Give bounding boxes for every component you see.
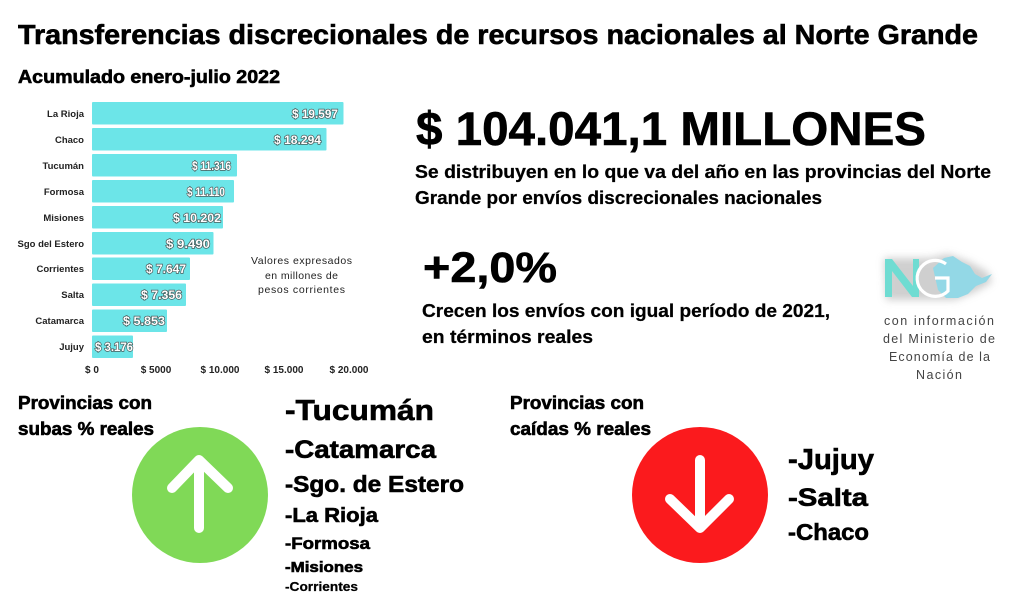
growth description [422, 301, 830, 347]
bar values: $ 9.490 [166, 237, 210, 251]
list: provinces falling: -Salta [788, 484, 869, 512]
x axis labels: $ 10.000 [201, 365, 240, 376]
province labels: Formosa [44, 187, 85, 198]
province labels: Salta [61, 290, 85, 301]
logo soft shadow [884, 254, 992, 300]
bar values: $ 5.853 [123, 314, 165, 328]
big figure description [415, 162, 991, 208]
big figure description: Grande por envíos discrecionales nacionales [415, 188, 822, 208]
province labels [17, 109, 85, 353]
list: provinces falling: -Chaco [788, 519, 869, 545]
list: provinces rising: -La Rioja [285, 505, 379, 527]
bar values: $ 7.647 [146, 262, 186, 276]
list: provinces rising: -Formosa [285, 534, 371, 553]
heading: provinces rising [18, 393, 154, 439]
list: provinces rising [285, 395, 464, 594]
icon: red down arrow [632, 427, 768, 563]
bar values: $ 10.202 [173, 211, 221, 225]
heading: provinces falling: caídas % reales [510, 419, 651, 439]
x axis labels: $ 15.000 [265, 365, 304, 376]
list: provinces rising: -Misiones [285, 560, 363, 576]
chart note: en millones de [265, 270, 338, 282]
chart note: Valores expresados [251, 255, 352, 267]
heading: provinces rising: subas % reales [18, 419, 154, 439]
logo: NG with map [884, 254, 992, 300]
big figure description: Se distribuyen en lo que va del año en las provincias del Norte [415, 162, 991, 182]
list: provinces falling [788, 444, 874, 545]
bar values: $ 11.110 [187, 185, 225, 199]
province labels: Catamarca [35, 316, 85, 327]
bar chart [17, 102, 369, 376]
chart note: pesos corrientes [258, 284, 345, 296]
bar values: $ 11.316 [192, 159, 231, 173]
province labels: Sgo del Estero [17, 239, 84, 250]
x axis labels: $ 20.000 [330, 365, 369, 376]
chart note [251, 255, 352, 296]
list: provinces rising: -Tucumán [285, 395, 434, 427]
province labels: Tucumán [42, 161, 84, 172]
title: Transferencias discrecionales de recursos nacionales al Norte Grande [18, 19, 978, 50]
province labels: Jujuy [59, 342, 85, 353]
bar values: $ 3.176 [95, 340, 133, 354]
heading: provinces rising: Provincias con [18, 393, 152, 413]
source text: Economía de la [889, 350, 990, 364]
icon: green up arrow [132, 427, 268, 563]
bar values [95, 107, 338, 354]
source text: Nación [916, 368, 962, 382]
list: provinces rising: -Sgo. de Estero [285, 471, 464, 497]
map silhouette [933, 256, 992, 298]
list: provinces falling: -Jujuy [788, 444, 874, 476]
source text [883, 314, 995, 382]
growth description: Crecen los envíos con igual período de 2021, [422, 301, 830, 321]
big figure: $ 104.041,1 MILLONES [416, 102, 926, 155]
province labels: Misiones [43, 213, 84, 224]
source text: con información [884, 314, 994, 328]
letter G [917, 260, 948, 296]
list: provinces rising: -Catamarca [285, 436, 437, 464]
heading: provinces falling [510, 393, 651, 439]
bar values: $ 19.597 [292, 107, 338, 121]
source text: del Ministerio de [883, 332, 995, 346]
bars [92, 102, 344, 358]
x axis labels: $ 0 [85, 365, 99, 376]
growth figure: +2,0% [423, 244, 557, 292]
growth description: en términos reales [422, 327, 593, 347]
x axis labels [85, 365, 369, 376]
heading: provinces falling: Provincias con [510, 393, 644, 413]
province labels: Chaco [55, 135, 84, 146]
province labels: Corrientes [36, 264, 84, 275]
list: provinces rising: -Corrientes [285, 580, 358, 594]
subtitle: Acumulado enero-julio 2022 [18, 67, 280, 87]
letter N [885, 259, 919, 297]
bar values: $ 18.294 [274, 133, 321, 147]
province labels: La Rioja [47, 109, 85, 120]
bar values: $ 7.356 [141, 288, 182, 302]
x axis labels: $ 5000 [141, 365, 172, 376]
